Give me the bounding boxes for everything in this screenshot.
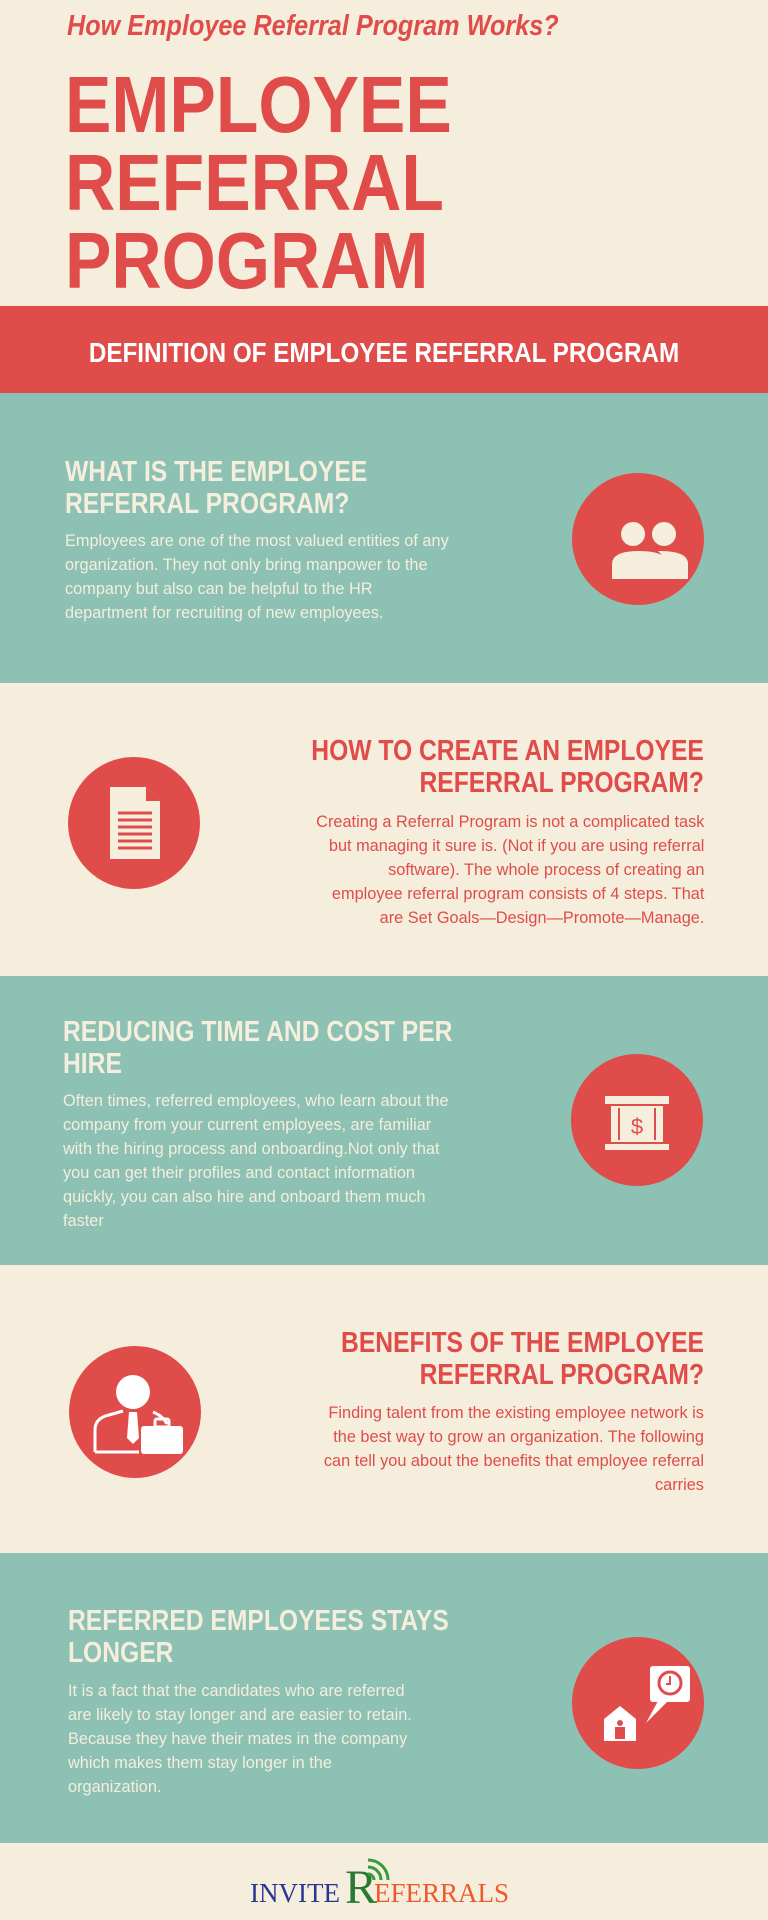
text: reducing time: company from your current employees, are familiar xyxy=(63,1115,431,1134)
icon: people xyxy=(572,473,704,605)
text: reducing time: Often times, referred employees, who learn about the xyxy=(63,1091,449,1110)
panel: what is xyxy=(0,393,768,683)
main title: EMPLOYEE xyxy=(65,60,452,149)
text: benefits: can tell you about the benefits that employee referral xyxy=(324,1451,704,1470)
banner: definition xyxy=(0,306,768,393)
icon: bank: $ xyxy=(631,1114,643,1139)
text: how to create: but managing it sure is. (Not if you are using referral xyxy=(328,836,704,855)
panel: reducing time xyxy=(0,976,768,1265)
text: stays longer: are likely to stay longer and are easier to retain. xyxy=(68,1705,412,1724)
heading: reducing time: HIRE xyxy=(63,1048,122,1080)
text: what is: Employees are one of the most valued entities of any xyxy=(65,531,449,550)
text: stays longer xyxy=(68,1681,412,1796)
logo: invite referrals: EFERRALS xyxy=(374,1878,509,1908)
text: benefits: Finding talent from the existing employee network is xyxy=(328,1403,704,1422)
icon: document xyxy=(68,757,200,889)
text: how to create: software). The whole process of creating an xyxy=(388,860,704,879)
heading: stays longer: REFERRED EMPLOYEES STAYS xyxy=(68,1605,449,1637)
panel: benefits xyxy=(69,1327,704,1494)
text: stays longer: Because they have their mates in the company xyxy=(68,1729,407,1748)
text: stays longer: It is a fact that the candidates who are referred xyxy=(68,1681,405,1700)
text: what is: organization. They not only bring manpower to the xyxy=(65,555,428,574)
main title: REFERRAL xyxy=(65,138,444,227)
icon: employee with briefcase xyxy=(69,1346,201,1478)
text: stays longer: which makes them stay longer in the xyxy=(68,1753,332,1772)
text: reducing time xyxy=(63,1091,449,1230)
heading: benefits: REFERRAL PROGRAM? xyxy=(420,1359,704,1391)
heading: what is: WHAT IS THE EMPLOYEE xyxy=(65,456,367,488)
heading: benefits xyxy=(341,1327,704,1391)
heading: what is xyxy=(65,456,367,520)
logo: invite referrals: R xyxy=(345,1861,377,1914)
text: how to create: employee referral program consists of 4 steps. That xyxy=(331,884,704,903)
text: what is xyxy=(65,531,449,622)
text: benefits: the best way to grow an organization. The following xyxy=(333,1427,704,1446)
text: reducing time: quickly, you can also hire and onboard them much xyxy=(63,1187,426,1206)
heading: stays longer: LONGER xyxy=(68,1637,173,1669)
heading: stays longer xyxy=(68,1605,449,1669)
heading: reducing time xyxy=(63,1016,452,1080)
subtitle: How Employee Referral Program Works? xyxy=(67,10,559,42)
text: how to create xyxy=(316,812,704,927)
heading: how to create: HOW TO CREATE AN EMPLOYEE xyxy=(311,735,704,767)
text: reducing time: you can get their profiles and contact information xyxy=(63,1163,415,1182)
main title: PROGRAM xyxy=(65,216,428,305)
text: reducing time: faster xyxy=(63,1211,104,1230)
logo: invite referrals: INVITE xyxy=(250,1878,340,1908)
panel: how to create xyxy=(68,735,704,927)
text: how to create: are Set Goals—Design—Promote—Manage. xyxy=(379,908,704,927)
text: what is: company but also can be helpful to the HR xyxy=(65,579,373,598)
text: reducing time: with the hiring process and onboarding.Not only that xyxy=(63,1139,440,1158)
heading: how to create: REFERRAL PROGRAM? xyxy=(420,767,704,799)
heading: benefits: BENEFITS OF THE EMPLOYEE xyxy=(341,1327,704,1359)
heading: what is: REFERRAL PROGRAM? xyxy=(65,488,349,520)
text: stays longer: organization. xyxy=(68,1777,161,1796)
icon: house and clock xyxy=(572,1637,704,1769)
logo: invite referrals xyxy=(250,1858,509,1914)
text: what is: department for recruiting of new employees. xyxy=(65,603,383,622)
text: benefits xyxy=(324,1403,704,1494)
heading: how to create xyxy=(311,735,704,799)
banner: definition: DEFINITION OF EMPLOYEE REFERRAL PROGRAM xyxy=(89,337,679,368)
text: how to create: Creating a Referral Program is not a complicated task xyxy=(316,812,704,831)
icon: bank xyxy=(571,1054,703,1186)
text: benefits: carries xyxy=(655,1475,704,1494)
panel: stays longer xyxy=(0,1553,768,1843)
heading: reducing time: REDUCING TIME AND COST PER xyxy=(63,1016,452,1048)
main title xyxy=(65,60,452,305)
